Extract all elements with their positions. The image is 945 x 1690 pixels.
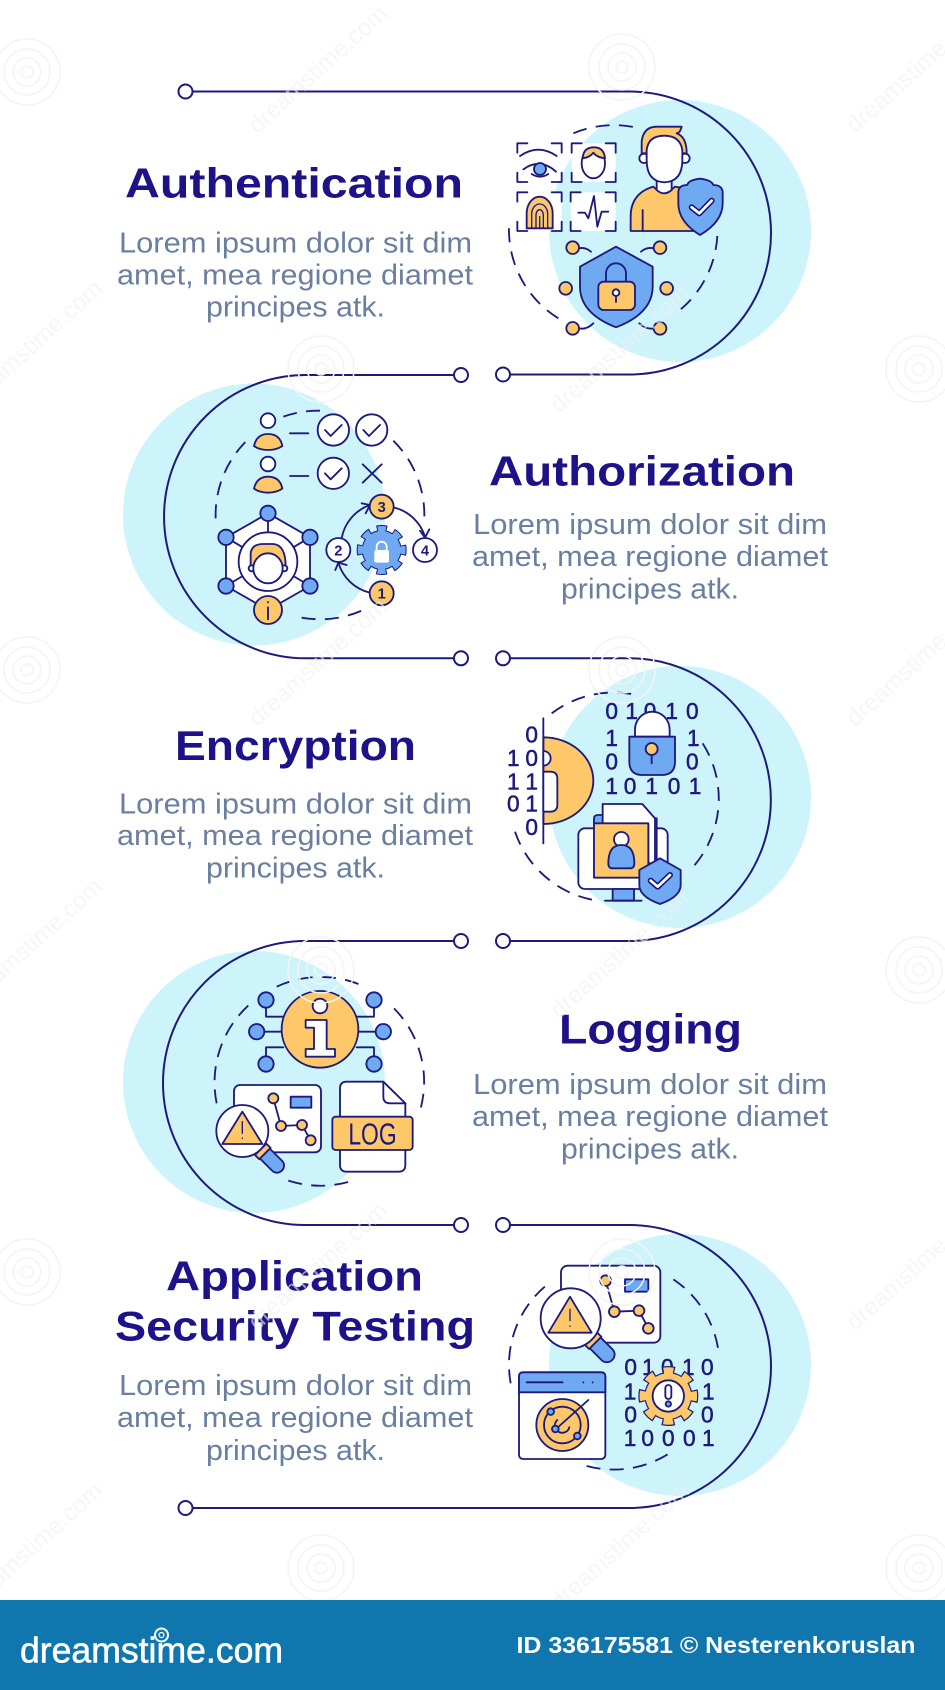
icon: encrypted data and protected files: 11	[507, 768, 538, 794]
footer logo: dreamstime.com: dreamstime.com	[20, 1630, 283, 1671]
heading: Application Security Testing	[115, 1253, 475, 1350]
text block: logging description	[472, 1069, 828, 1165]
background circle: encryption	[549, 666, 811, 928]
infographic canvas: dreamstime.com	[243, 1197, 393, 1336]
heading: Encryption: Encryption	[175, 722, 416, 769]
icon: encrypted data and protected files: 11	[605, 725, 700, 751]
icon: encrypted data and protected files: 10	[507, 745, 538, 771]
text block: authorization description: principes atk.	[561, 573, 739, 605]
icon: vulnerability scan, radar and code gear: 10001	[624, 1425, 715, 1451]
icon: encrypted data and protected files: 10101	[605, 773, 701, 799]
text block: logging description: Lorem ipsum dolor sit dim	[473, 1069, 827, 1101]
connector: authorization	[164, 368, 468, 665]
icon: encrypted data and protected files: 0	[525, 814, 538, 840]
icon: access permissions and process cycle: 1	[378, 587, 386, 603]
text block: encryption description	[117, 788, 473, 884]
heading: Logging: Logging	[559, 1005, 742, 1052]
icon: encrypted data and protected files: 00	[605, 748, 699, 774]
text block: application security testing description	[117, 1370, 473, 1467]
connector: logging	[163, 934, 468, 1232]
panel: authentication	[117, 84, 811, 382]
text block: authentication description	[117, 228, 473, 324]
panel: logging	[123, 934, 828, 1232]
icon: access permissions and process cycle: 2	[334, 543, 342, 559]
text block: logging description: amet, mea regione diamet	[472, 1101, 828, 1133]
text block: authentication description: Lorem ipsum dolor sit dim	[119, 228, 472, 260]
icon: access permissions and process cycle: 4	[421, 543, 430, 559]
footer bar	[0, 1600, 945, 1690]
text block: authorization description	[472, 509, 828, 605]
text block: authentication description: amet, mea regione diamet	[117, 259, 473, 291]
icon: access permissions and process cycle	[216, 411, 437, 624]
infographic canvas: dreamstime.com	[243, 593, 393, 732]
icon: encrypted data and protected files: 01	[507, 791, 538, 817]
infographic canvas: dreamstime.com	[545, 1477, 695, 1616]
background circle: application security testing	[549, 1234, 811, 1496]
heading: Application Security Testing: Application	[166, 1253, 423, 1300]
icon: information, log file and alert inspection	[215, 977, 424, 1186]
icon: vulnerability scan, radar and code gear: 01010	[624, 1354, 714, 1380]
heading: Authorization: Authorization	[489, 447, 795, 494]
heading: Application Security Testing: Security Testing	[115, 1303, 475, 1350]
heading: Authentication: Authentication	[125, 160, 463, 206]
infographic canvas: dreamstime.com	[545, 885, 695, 1024]
text block: encryption description: amet, mea regione diamet	[117, 820, 473, 852]
text block: application security testing description: principes atk.	[206, 1435, 385, 1467]
icon: vulnerability scan, radar and code gear: 11	[624, 1378, 715, 1404]
text block: authorization description: Lorem ipsum dolor sit dim	[473, 509, 827, 541]
panel: application security testing	[115, 1218, 811, 1515]
icon: vulnerability scan, radar and code gear: 00	[624, 1402, 714, 1428]
panel: encryption	[117, 651, 811, 948]
icon: encrypted data and protected files: 0	[525, 722, 538, 748]
icon: information, log file and alert inspection: LOG	[348, 1117, 397, 1151]
footer credit: image id and author: ID 336175581 © Nesterenkoruslan	[516, 1632, 916, 1658]
text block: encryption description: principes atk.	[206, 852, 385, 884]
text block: application security testing description: amet, mea regione diamet	[117, 1402, 473, 1434]
icon: encrypted data and protected files: 01010	[605, 698, 699, 724]
background circle: authorization	[123, 384, 385, 646]
text block: application security testing description: Lorem ipsum dolor sit dim	[119, 1370, 472, 1402]
text block: authorization description: amet, mea regione diamet	[472, 541, 828, 573]
text block: logging description: principes atk.	[561, 1133, 739, 1165]
connector: encryption	[496, 651, 771, 948]
icon: biometric identity and shield lock	[509, 125, 723, 335]
text block: authentication description: principes atk.	[206, 292, 385, 324]
text block: encryption description: Lorem ipsum dolor sit dim	[119, 788, 472, 820]
connector: authentication	[178, 84, 771, 382]
infographic canvas: dreamstime.com	[243, 0, 393, 139]
connector: application security testing	[178, 1218, 771, 1515]
background circle: logging	[123, 951, 385, 1213]
infographic canvas: dreamstime.com	[545, 280, 695, 419]
icon: encrypted data and protected files	[507, 692, 719, 904]
panel: authorization	[123, 368, 828, 665]
background circle: authentication	[549, 100, 811, 362]
icon: vulnerability scan, radar and code gear	[509, 1266, 718, 1470]
icon: access permissions and process cycle: 3	[378, 500, 386, 516]
